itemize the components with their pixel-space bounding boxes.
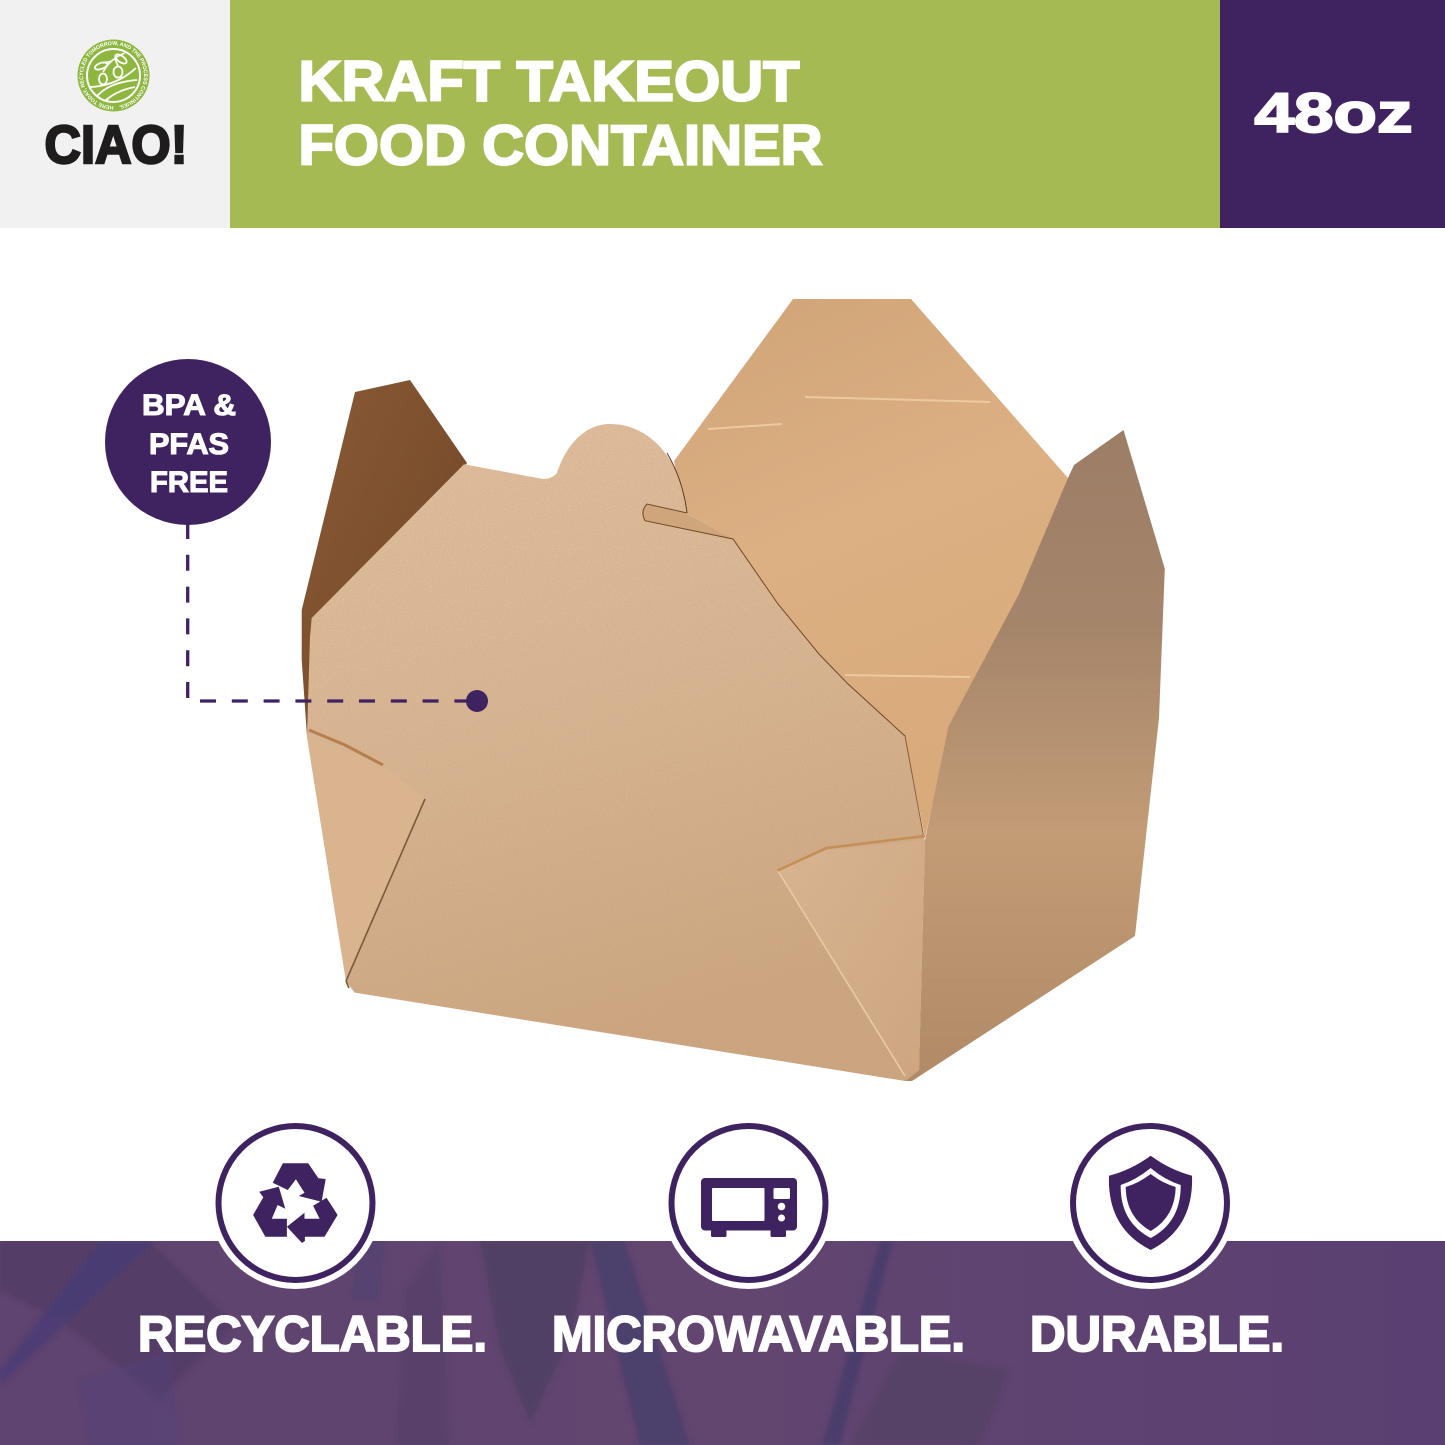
header: logo panel [0,0,230,228]
lid slit [642,504,733,539]
callout text [142,389,236,499]
header: title panel [230,0,1220,228]
back flap [674,299,1068,838]
callout: BPA and PFAS free [105,359,488,712]
callout text: FREE [150,466,228,499]
callout badge [105,359,271,525]
title: FOOD CONTAINER [298,114,822,178]
feature: recyclable [138,1117,487,1362]
label: MICROWAVABLE. [552,1306,965,1362]
title [298,50,822,178]
feature: microwavable [552,1117,965,1362]
size label: 48oz [1254,81,1412,144]
callout leader line [188,523,470,701]
fold creases on back flap [708,397,990,677]
right side panel [905,430,1165,1081]
left bottom fold [307,730,425,988]
icon: microwave [662,1117,834,1289]
feature: durable [1030,1117,1284,1362]
left inner flap [302,380,467,736]
logo: green recycling badge: HERE TODAY, RECYCLED TOMORROW, AND THE PROCESS CONTINUES. [79,41,148,110]
right bottom fold [778,836,925,1076]
icon: recycle [210,1117,382,1289]
icon: shield [1064,1117,1236,1289]
product photo: kraft takeout box [300,299,1165,1085]
callout dot [466,690,488,712]
bottom purple band with leaf texture [0,1241,1445,1445]
label: DURABLE. [1030,1306,1284,1362]
paper grain [310,425,906,908]
callout text: PFAS [149,428,229,461]
callout text: BPA & [142,389,236,422]
front panel and lid [307,424,925,1081]
header: size panel [1220,0,1445,228]
label: RECYCLABLE. [138,1306,487,1362]
title: KRAFT TAKEOUT [298,50,800,114]
logo wordmark: CIAO! [44,115,188,175]
